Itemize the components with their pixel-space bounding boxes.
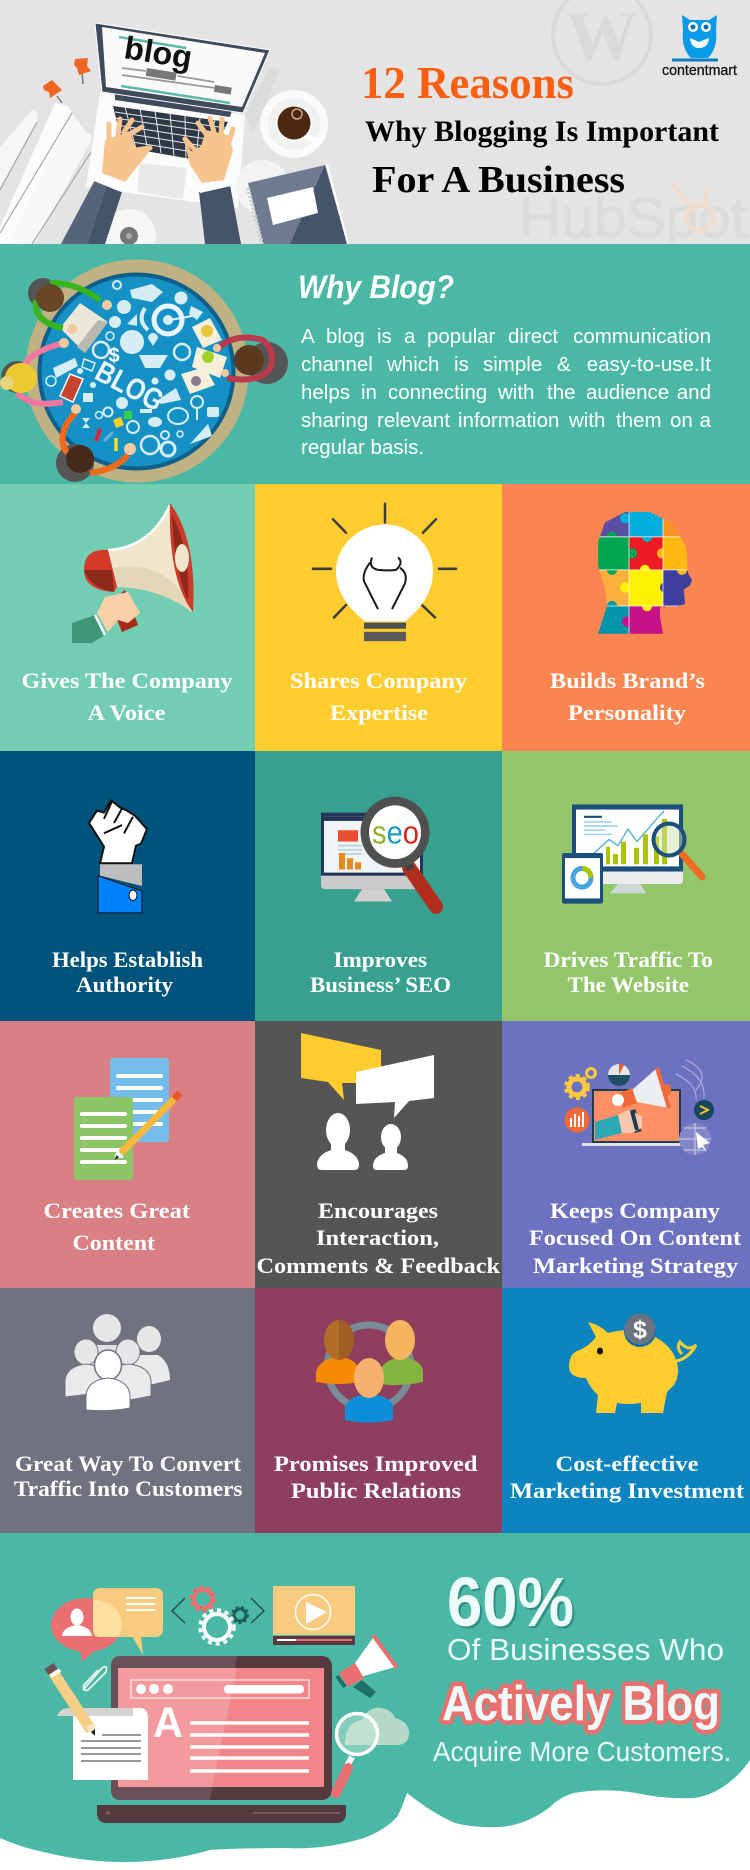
text block: why blog paragraph: is	[454, 353, 469, 376]
label	[274, 1451, 478, 1503]
text: blog on laptop screen: blog	[122, 29, 195, 76]
icon: note with pencil	[49, 1666, 148, 1780]
icon: group of people	[65, 1314, 170, 1411]
panel: drives traffic to the website	[502, 751, 750, 1021]
label: Drives Traffic To	[544, 947, 713, 972]
label: Helps Establish	[52, 947, 203, 972]
text block: why blog paragraph: connecting	[388, 381, 487, 404]
icon: video player	[273, 1586, 355, 1645]
label: Keeps Company	[550, 1198, 720, 1223]
text block: why blog paragraph: A	[301, 325, 315, 348]
icon: magnifier	[336, 1714, 378, 1793]
icon: megaphone	[337, 1635, 397, 1698]
text block: why blog paragraph: easy-to-use.It	[587, 353, 711, 376]
label: Traffic Into Customers	[14, 1476, 243, 1501]
text block: why blog paragraph: channel	[301, 353, 373, 376]
icon: paper clip	[83, 1667, 106, 1690]
label: Great Way To Convert	[15, 1451, 242, 1476]
panel: great way to convert traffic	[0, 1288, 255, 1533]
text: A on laptop: A	[153, 1699, 183, 1747]
text block: why blog paragraph: relevant	[377, 409, 450, 432]
text block: why blog paragraph: direct	[508, 325, 558, 348]
text: contentmart: contentmart	[662, 62, 738, 79]
label: Cost-effective	[556, 1451, 699, 1476]
icon: cloud	[345, 1708, 409, 1745]
illustration: person left	[0, 338, 83, 404]
label: Gives The Company	[22, 668, 232, 693]
icon: contentmart owl logo	[662, 15, 738, 79]
illustration: rolled papers	[0, 103, 92, 244]
panel: helps establish authority	[0, 751, 255, 1021]
text block: why blog paragraph: with	[568, 409, 605, 432]
text block: why blog paragraph: sharing	[301, 409, 368, 432]
label	[510, 1451, 745, 1503]
text block: why blog paragraph: blog	[326, 325, 365, 348]
label	[22, 668, 232, 725]
panel: gives the company a voice	[0, 484, 255, 751]
illustration: meeting table	[0, 260, 288, 482]
label: Business’ SEO	[310, 972, 451, 997]
icon: push pins	[43, 58, 91, 103]
text block: why blog paragraph: which	[386, 353, 439, 376]
title: 12 Reasons	[361, 58, 574, 108]
label	[256, 1198, 501, 1278]
icon: speech bubbles and people	[301, 1033, 434, 1170]
text block: why blog paragraph: a	[404, 325, 416, 348]
panel: keeps company focused	[502, 1021, 750, 1288]
text: dollar sign on coin: $	[633, 1316, 647, 1344]
label: Builds Brand’s	[550, 668, 705, 693]
icon: megaphone	[72, 503, 194, 643]
label: Public Relations	[291, 1478, 461, 1503]
label	[14, 1451, 243, 1501]
icon: raised fist	[89, 800, 147, 913]
label: Promises Improved	[274, 1451, 478, 1476]
label: The Website	[568, 972, 689, 997]
tablet	[60, 374, 83, 402]
text block: why blog paragraph: &	[557, 353, 571, 376]
text block: why blog paragraph: information	[458, 409, 559, 432]
text block: why blog paragraph: regular basis.	[301, 436, 424, 459]
illustration: notebook	[236, 160, 348, 244]
text block: why blog paragraph: simple	[483, 353, 542, 376]
panel: builds brand's personality	[502, 484, 750, 751]
icon: connected people	[316, 1320, 423, 1422]
label: A Voice	[88, 700, 166, 725]
panel: header	[0, 0, 750, 263]
panel: creates great content	[0, 1021, 255, 1288]
label: Shares Company	[290, 668, 467, 693]
title: For A Business	[372, 159, 625, 201]
label	[310, 947, 451, 997]
icon: SEO magnifier on monitor	[321, 797, 436, 907]
text block: why blog paragraph: and	[677, 381, 711, 404]
text block: why blog paragraph: popular	[427, 325, 496, 348]
label: Interaction,	[316, 1225, 439, 1250]
icon: gears	[172, 1587, 264, 1644]
icon: chat bubbles	[51, 1588, 163, 1662]
label: Marketing Strategy	[533, 1253, 738, 1278]
label: Authority	[76, 972, 173, 997]
text block: why blog paragraph: audience	[586, 381, 669, 404]
label: Content	[72, 1230, 156, 1255]
icon: puzzle head	[598, 512, 692, 634]
text: dollar sign on table: $	[108, 345, 120, 367]
label: Personality	[568, 700, 686, 725]
label	[290, 668, 467, 725]
illustration: hands and sleeves	[61, 118, 241, 244]
watermark: HubSpot logo: HubSpot	[519, 186, 747, 250]
illustration: coffee cup	[260, 90, 328, 158]
label: Expertise	[330, 700, 428, 725]
label: Focused On Content	[529, 1225, 742, 1250]
icon: piggy bank	[569, 1314, 696, 1413]
title: Why Blogging Is Important	[365, 115, 719, 148]
label	[529, 1198, 742, 1278]
label: Encourages	[318, 1198, 438, 1223]
label	[544, 947, 713, 997]
text block: why blog paragraph: is	[377, 325, 392, 348]
label	[52, 947, 203, 997]
panel: cost-effective marketing investment	[502, 1288, 750, 1533]
illustration: laptop with web page	[97, 1656, 346, 1823]
icon: documents and pencil	[74, 1058, 180, 1180]
text: 60%: 60%	[447, 1563, 574, 1641]
illustration: person top left	[28, 278, 112, 334]
text block: why blog paragraph: with	[497, 381, 534, 404]
icons on table	[46, 281, 219, 456]
text: actively blog: Actively Blog	[442, 1677, 720, 1731]
illustration: papers on table	[181, 318, 227, 394]
text block: why blog paragraph: on	[670, 409, 693, 432]
label: Improves	[334, 947, 427, 972]
icon: traffic analytics screens	[562, 804, 702, 904]
text block: why blog paragraph: helps	[301, 381, 350, 404]
title	[364, 68, 719, 192]
label: Marketing Investment	[510, 1478, 745, 1503]
panel: improves business' SEO	[255, 751, 502, 1021]
text: of businesses who: Of Businesses Who	[447, 1632, 724, 1667]
heading: Why Blog?: Why Blog?	[298, 269, 454, 305]
illustration: person right	[213, 338, 288, 384]
watermark: WordPress logo	[553, 0, 651, 84]
text: acquire more customers: Acquire More Customers.	[433, 1736, 731, 1767]
text block: why blog paragraph: them	[616, 409, 662, 432]
label	[550, 668, 705, 725]
panel: encourages interaction	[255, 1021, 502, 1288]
text: BLOG on table: BLOG	[90, 355, 169, 418]
panel: shares company expertise	[255, 484, 502, 751]
text block: why blog paragraph: the	[547, 381, 576, 404]
label: Creates Great	[44, 1198, 191, 1223]
panel: why blog	[0, 244, 750, 484]
label: Comments & Feedback	[256, 1253, 501, 1278]
illustration: laptop	[86, 23, 280, 208]
icon: content marketing laptop	[564, 1060, 714, 1155]
illustration: open laptop on table	[60, 303, 108, 353]
text block: why blog paragraph: in	[361, 381, 377, 404]
text: seo: seo	[372, 814, 419, 851]
illustration: CD	[105, 209, 156, 244]
text block: why blog paragraph: a	[700, 409, 712, 432]
illustration: person bottom	[56, 404, 136, 482]
label	[44, 1198, 191, 1255]
panel: promises improved public relations	[255, 1288, 502, 1533]
panel: 60% statistic	[0, 1533, 750, 1862]
text block: why blog paragraph: communication	[573, 325, 711, 348]
icon: light bulb	[313, 504, 456, 641]
